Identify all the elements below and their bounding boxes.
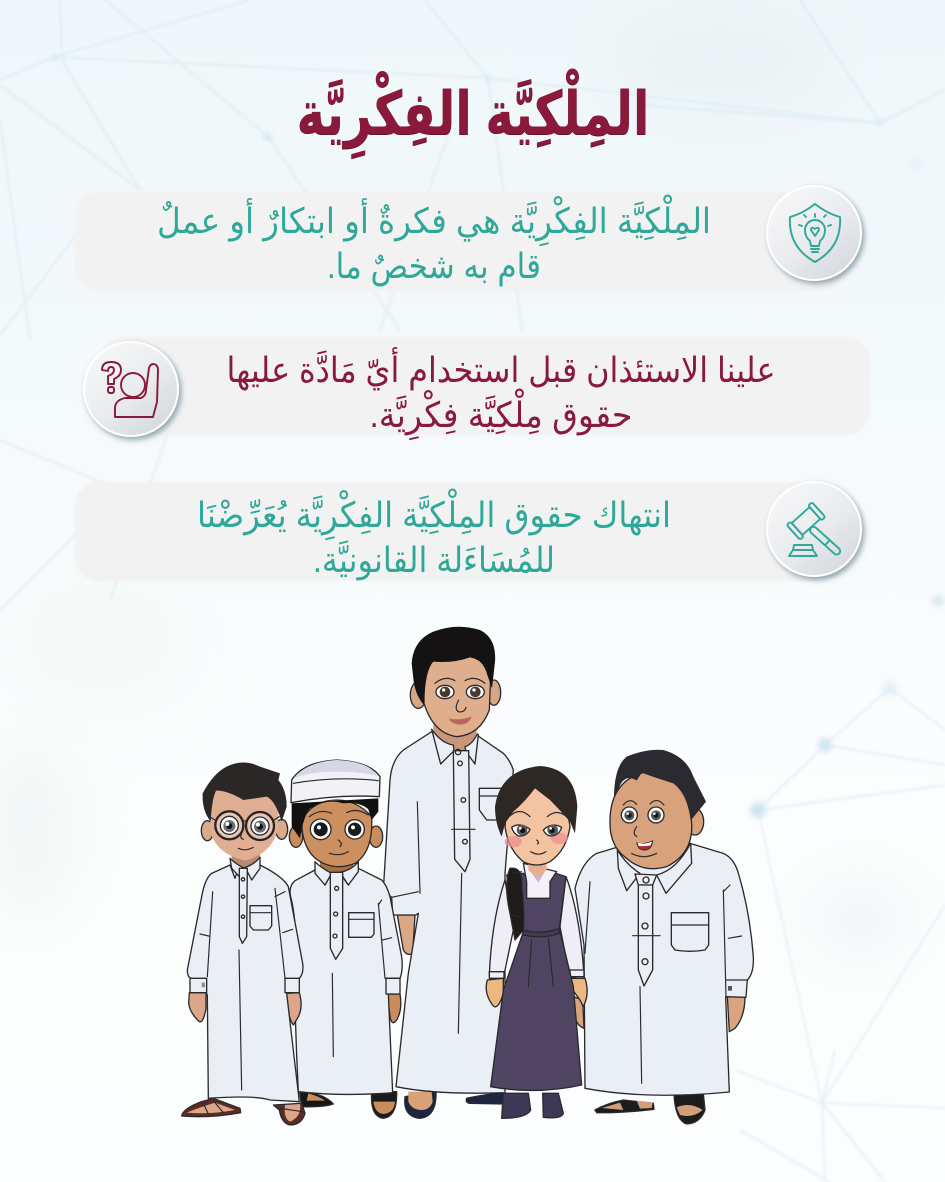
text: permission: علينا الاستئذان قبل استخدام أيّ مَادَّة عليها: [226, 347, 776, 391]
character: girl with braid: [486, 766, 587, 1118]
text: definition: المِلْكِيَّة الفِكْرِيَّة هي فكرةٌ أو ابتكارٌ أو عملٌ: [157, 194, 711, 247]
icon: shield with light bulb: [767, 186, 861, 280]
character: boy with cap: [289, 760, 402, 1118]
title: المِلْكِيَّة الفِكْرِيَّة: [296, 68, 650, 159]
panel: legal consequences: [75, 482, 861, 581]
text: permission: [226, 347, 776, 441]
text: legal consequences: [197, 488, 671, 581]
panel: permission: [84, 337, 870, 441]
text: legal consequences: انتهاك حقوق المِلْكِيَّة الفِكْرِيَّة يُعَرِّضْنَا: [197, 488, 671, 541]
text: definition: قام به شخصٌ ما.: [327, 247, 541, 287]
character: boy in large robe: [575, 750, 753, 1124]
icon: gavel: [767, 482, 861, 576]
illustration: group of five children: [182, 627, 753, 1125]
text: definition: [157, 194, 711, 287]
text: legal consequences: للمُسَاءَلة القانونيَّة.: [313, 539, 555, 581]
character: boy with glasses: [182, 762, 305, 1125]
text: permission: حقوق مِلْكِيَّة فِكْرِيَّة.: [370, 388, 632, 441]
panel: definition: [75, 186, 861, 291]
character: tall boy: [383, 627, 513, 1118]
icon: raised hand with question mark: [84, 342, 178, 436]
